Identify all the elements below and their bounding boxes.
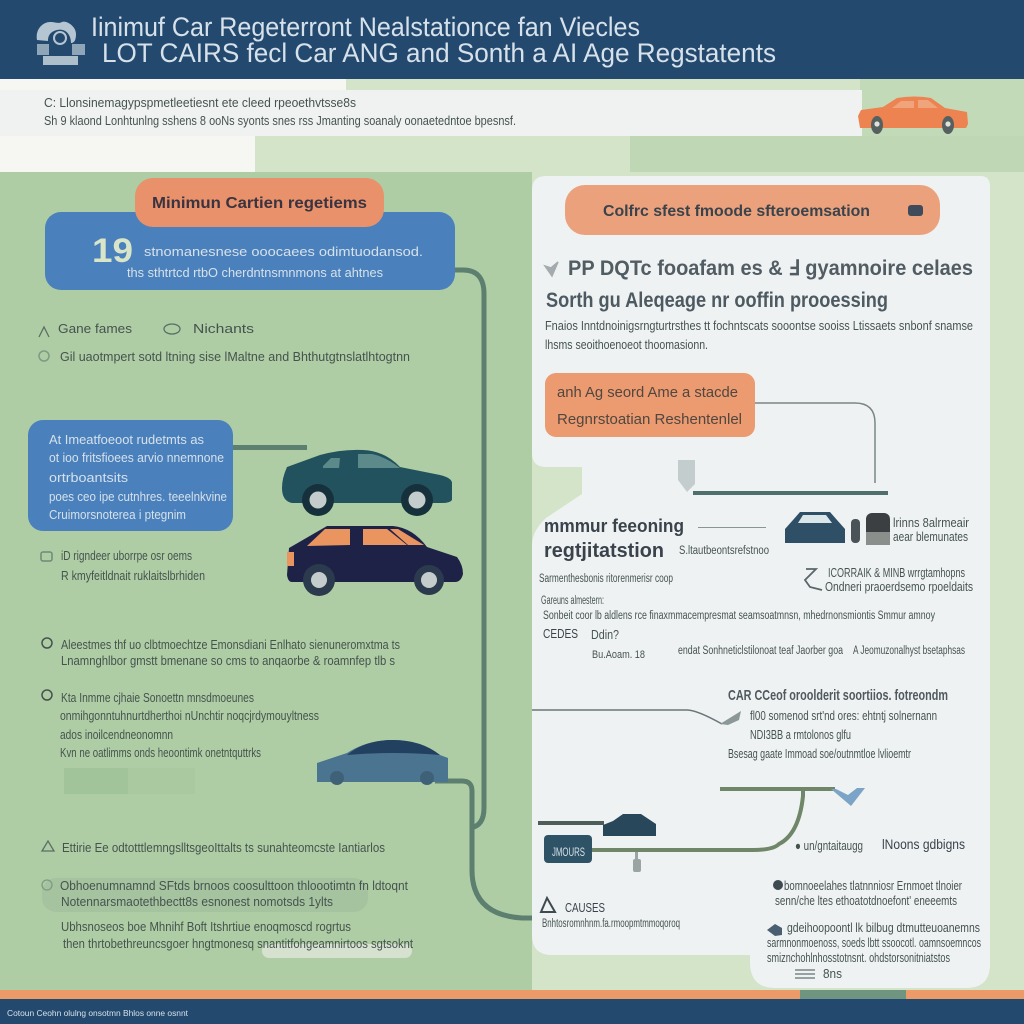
icon: outline pointer [805,569,822,590]
text: bottom left: Obhoenumnamnd SFtds brnoos coosulttoon thloootimtn fn ldtoqnt [60,879,408,893]
heading: right panel: PP DQTc fooafam es & Ⅎ gyamnoire celaes [568,257,973,280]
text: note with icon [41,549,205,583]
footer: Cotoun Ceohn olulng onsotmn Bhlos onne osnnt [7,1009,189,1018]
icon: small figure and tyre [851,513,890,545]
icon: teal sedan [282,450,452,516]
text: details block: Gareuns almestern: [541,595,604,607]
text: pointer caption [825,566,973,594]
text: bottom right: senn/che ltes ethoatotdnoefont' eneeemts [775,894,957,908]
title: Iinimuf Car Regeterront Nealstationce fan Viecles [91,12,640,42]
text: note with icon: iD rigndeer uborrpe osr oems [61,549,192,563]
text: bottom left: Ubhsnoseos boe Mhnihf Boft Itshrtiue enoqmoscd rogrtus [61,920,351,934]
badge: dark tag [544,835,592,863]
icon: feather [720,711,741,725]
text: details block: CEDES [543,626,578,641]
heading: right panel [545,257,973,312]
blue card: notes: ot ioo fritsfioees arvio nnemnone [49,451,224,465]
icon: warning triangle [42,841,54,851]
icon: blue chevron [831,788,865,806]
text: car front caption: aear blemunates [893,530,968,544]
connector: curved green line [592,788,803,850]
text: CAR section [728,687,948,761]
heading: minimum registration: S.ltautbeontsrefstnoo [679,545,769,557]
orange pill heading [135,178,384,227]
blurred patch behind bottom text [42,878,412,958]
text: bottom left: Notennarsmaotethbectt8s esnonest nomotsds 1ylts [61,895,333,909]
text: small label: Sarmenthesbonis ritorenmerisr coop [539,573,673,585]
text: short facts: Gil uaotmpert sotd ltning sise lMaltne and Bhthutgtnslatlhtogtnn [60,350,410,364]
connector thin [698,527,766,528]
blue card: age 19 [45,212,455,290]
text: right paragraph: Fnaios Inntdnoinigsrngturtrsthes tt fochntscats sooontse sooiss Ltissaets snbonf snamse [545,319,973,333]
connector: horizontal bar [720,787,835,791]
connector with feather [532,710,741,725]
text: short facts: Gane fames [58,322,132,336]
intro strip: C: Llonsinemagypspmetleetiesnt ete cleed rpeoethvtsse8s [44,96,356,110]
text: details block: Ddin? [591,627,619,642]
connector: left lower [435,781,532,918]
text: details block [541,595,965,661]
icon: small car with line [538,814,656,836]
text: middle paragraph: Lnamnghlbor gmstt bmenane so cms to anqaorbe & roamnfep tlb s [61,654,395,668]
icon: small lines [795,970,815,978]
orange card: age: Regnrstoatian Reshentenlel [557,412,742,428]
text: short facts [39,322,410,364]
footer [0,990,1024,1024]
text: CAR section: fl00 somenod srt'nd ores: ehtntj solnernann [750,709,937,723]
orange pill: right heading: Colfrc sfest fmoode sfteroemsation [603,203,870,220]
text: pointer caption: Ondneri praoerdsemo rpoeldaits [825,580,973,594]
icon: pill badge [908,205,923,216]
heading: minimum registration [544,516,769,562]
text: note with icon: R kmyfeitldnait ruklaitslbrhiden [61,569,205,583]
text: section labels: lNoons gdbigns [882,837,965,852]
blue card: notes: poes ceo ipe cutnhres. teeelnkvine [49,490,227,504]
text: CAR section: NDI3BB a rmtolonos glfu [750,728,851,742]
text: causes block: CAUSES [565,901,605,915]
icon: blue car [317,740,448,785]
orange card: age: anh Ag seord Ame a stacde [557,385,738,401]
text: details block: endat Sonhneticlstilonoat teaf Jaorber goa [678,645,843,657]
title [91,12,776,68]
intro strip: Sh 9 klaond Lonhtunlng sshens 8 ooNs syonts snes rss Jmanting soanaly oonaetedntoe bpesnsf. [44,114,516,128]
panel: left green [0,172,532,990]
blue card: age 19: 19 [92,232,133,270]
text: bottom left: then thrtobethreuncsgoer hngtmonesq snantitfohgeamnirtoos sgtsoknt [63,937,413,951]
icon: triangle [39,327,49,337]
text: causes block [541,898,680,930]
blue card: notes: ortrboantsits [49,471,128,485]
title: LOT CAIRS fecl Car ANG and Sonth a AI Age Regstatents [102,38,776,68]
text: requirements list [42,690,319,760]
icon: gray chevron [678,460,695,492]
text: middle paragraph [42,638,400,668]
text: bottom left [42,841,413,951]
text: requirements list: onmihgonntuhnurtdherthoi nUnchtir noqcjrdymouyltness [60,709,319,723]
orange pill heading: Minimun Cartien regetiems [152,195,367,212]
text: details block: Bu.Aoam. 18 [592,649,645,661]
connector: orange card [755,403,875,483]
badge: dark tag: JMOURS [552,845,585,859]
text: pointer caption: ICORRAIK & MINB wrrgtamhopns [828,566,965,580]
text: bottom right: 8ns [823,967,842,981]
blue card: notes: At Imeatfoeoot rudetmts as [49,433,204,447]
text: car front caption: lrinns 8alrmeair [893,516,969,530]
text: section labels: ● un/gntaitaugg [795,839,863,853]
text: right paragraph: lhsms seoithoenoeot thoomasionn. [545,338,708,352]
text: bottom right: bomnoeelahes tlatnnniosr Ernmoet tlnoier [784,879,962,893]
orange card: age [545,373,755,437]
text: requirements list: ados inoilcendneonomnn [60,728,173,742]
blue card: notes: Cruimorsnoterea i ptegnim [49,508,186,522]
icon: car front [785,512,845,543]
text: bottom right: gdeihoopoontl lk bilbug dtmutteuoanemns [787,921,980,935]
icon: header logo [37,22,85,65]
panel: right white [532,176,990,988]
icon: orange car [858,96,968,134]
text: short facts: Nichants [193,322,254,336]
connector: left upper [455,270,484,828]
heading: minimum registration: mmmur feeoning [544,516,684,536]
blue card: age 19: stnomanesnese ooocaees odimtuodansod. [144,245,423,259]
blurred patch [64,768,195,794]
icon: check mark [545,262,558,276]
text: CAR section: CAR CCeof oroolderit soortiios. fotreondm [728,687,948,704]
icon: eye [164,324,180,334]
text: bottom right [767,879,981,981]
heading: right panel: Sorth gu Aleqeage nr ooffin prooessing [546,289,888,312]
icon: circle [39,351,49,361]
text: car front caption [893,516,969,544]
text: bottom left: Ettirie Ee odtotttlemngslltsgeoIttalts ts sunahteomcste Iantiarlos [62,841,385,855]
icon: hanging tag [633,852,641,872]
text: section labels [795,837,965,853]
header band [0,0,1024,79]
text: bottom right: smiznchohlnhosstotnsnt. ohdstorsonitniatstos [767,951,950,965]
connector: blue card to car [233,445,307,450]
text: causes block: Bnhtosromnhnm.fa.rmoopmtmmoqoroq [542,918,680,930]
heading: minimum registration: regtjitatstion [544,540,664,562]
text: details block: A Jeomuzonalhyst bsetaphsas [853,645,965,657]
blue card: age 19: ths sthtrtcd rtbO cherdntnsmnmons at ahtnes [127,266,383,280]
text: middle paragraph: Aleestmes thf uo clbtmoechtze Emonsdiani Enlhato sienuneromxtma ts [61,638,400,652]
text: requirements list: Kvn ne oatlimms onds heoontimk onetntquttrks [60,746,261,760]
icon: navy hatchback [287,526,463,596]
divider bar [693,491,888,495]
text: right paragraph [545,319,973,352]
text: requirements list: Kta Inmme cjhaie Sonoettn mnsdmoeunes [61,691,254,705]
icon: small fish [767,924,782,936]
blue card: notes [28,420,233,531]
intro strip [0,90,862,136]
text: CAR section: Bsesag gaate Immoad soe/outnmtloe lvlioemtr [728,747,911,761]
orange pill: right heading [565,185,940,235]
